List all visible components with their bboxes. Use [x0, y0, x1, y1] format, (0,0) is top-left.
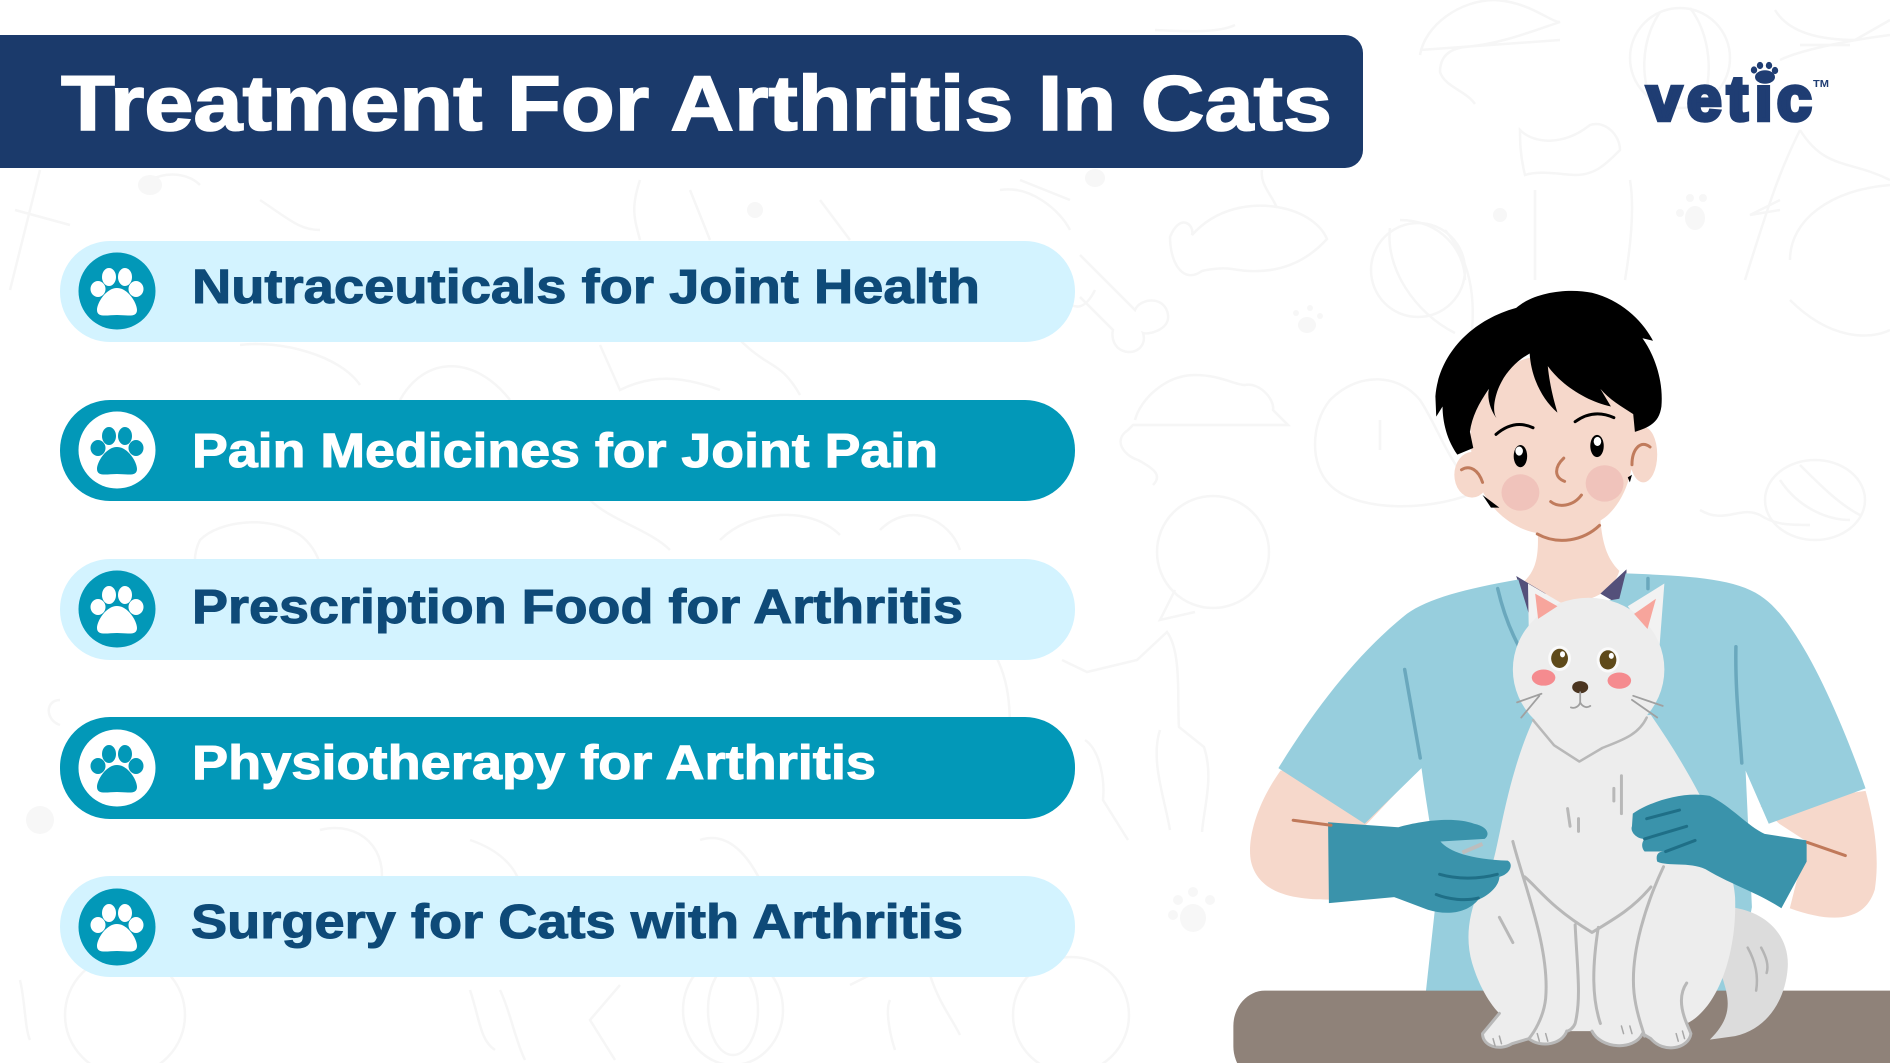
cat [1468, 584, 1788, 1048]
icon: paw 3 [90, 586, 144, 634]
list item 1: Nutraceuticals for Joint Health [192, 261, 980, 314]
logo: vetic: TM [1813, 79, 1829, 90]
icon: paw 1 [90, 268, 144, 316]
list item 2 [60, 400, 1075, 501]
icon: paw 5 [90, 904, 144, 952]
gloves [1293, 795, 1845, 913]
list item 4: Physiotherapy for Arthritis [192, 737, 876, 790]
list item 5 [60, 876, 1075, 977]
title: Treatment For Arthritis In Cats [61, 59, 1332, 147]
list item 3: Prescription Food for Arthritis [192, 581, 963, 634]
list item 2: Pain Medicines for Joint Pain [192, 425, 938, 478]
list item 1 [60, 241, 1075, 342]
hair [1435, 291, 1662, 455]
list item 5: Surgery for Cats with Arthritis [191, 896, 963, 949]
title banner [0, 35, 1363, 168]
vet [1250, 291, 1877, 993]
table [1233, 991, 1890, 1063]
illustration: vet holding a white cat [1233, 291, 1890, 1063]
list item 3 [60, 559, 1075, 660]
list item 4 [60, 717, 1075, 819]
icon: paw 4 [90, 745, 144, 793]
logo: vetic: vetic [1647, 65, 1811, 134]
icon: paw 2 [90, 427, 144, 475]
